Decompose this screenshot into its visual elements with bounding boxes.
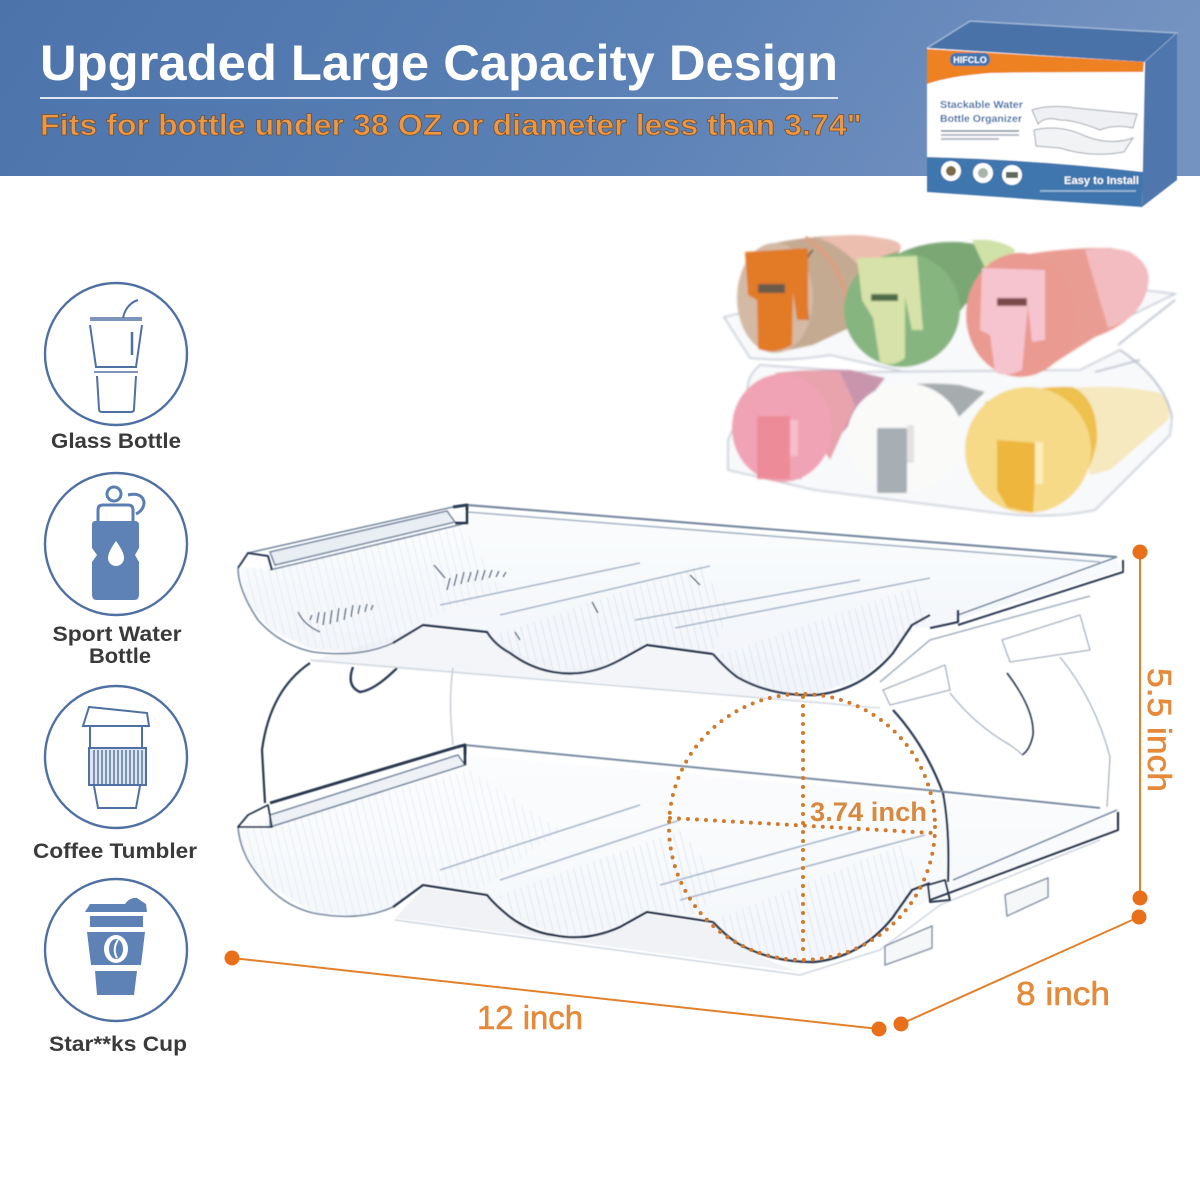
- dimension: 5.5 inch: [1132, 544, 1178, 906]
- upper tray lines: [238, 505, 1117, 682]
- upper tray strong dash marks: [298, 565, 700, 640]
- dimension: 12 inch: [224, 950, 886, 1036]
- label: sport water bottle: Bottle: [89, 645, 151, 668]
- icon: cup: [45, 879, 187, 1021]
- dimension: 5.5 inch: 5.5 inch: [1141, 668, 1178, 792]
- product box: HIFCLO: [953, 55, 987, 65]
- label: sport water bottle: Sport Water: [52, 623, 182, 646]
- subtitle: Fits for bottle under 38 OZ or diameter less than 3.74": [40, 109, 862, 142]
- diameter label: 3.74 inch: [810, 797, 927, 827]
- icon: sport water bottle: [45, 473, 187, 615]
- rack outline small: [724, 289, 1175, 516]
- bottle: yellow: [965, 387, 1169, 513]
- icon: coffee tumbler: [45, 686, 187, 828]
- product box: [927, 21, 1177, 207]
- upper tray fill: [240, 510, 1123, 695]
- bottle: white and grey: [847, 383, 985, 493]
- rack rim small: [1095, 300, 1175, 418]
- dimension: 8 inch: 8 inch: [1016, 975, 1110, 1012]
- header band: [0, 0, 1200, 176]
- lower tray fill: [240, 755, 1118, 962]
- bottle: light pink: [732, 370, 885, 482]
- icon: glass bottle: [45, 283, 187, 425]
- title: Upgraded Large Capacity Design: [40, 35, 838, 91]
- product box: Bottle Organizer: [940, 113, 1022, 125]
- product box: Easy to Install: [1064, 175, 1139, 187]
- photo: stacked rack with bottles: [724, 235, 1175, 516]
- bottle: salmon pink: [966, 248, 1149, 377]
- diameter guide: [669, 694, 935, 960]
- bottle: green: [844, 240, 1015, 367]
- dimension: 8 inch: [894, 910, 1146, 1032]
- dimension: 12 inch: 12 inch: [477, 999, 583, 1036]
- main product: two-tier rack: [238, 505, 1123, 975]
- support arcs: [262, 663, 1033, 882]
- bottle: orange and tan: [737, 235, 901, 353]
- product box: Stackable Water: [940, 99, 1023, 111]
- feet: [885, 878, 1048, 965]
- band under upper tray: [310, 627, 880, 708]
- shadow under lower tray: [395, 840, 1100, 975]
- label: coffee tumbler: Coffee Tumbler: [33, 840, 197, 863]
- lower tray lines: [238, 745, 1117, 916]
- label: glass bottle: Glass Bottle: [51, 430, 181, 453]
- label: sport water bottle: [52, 623, 182, 668]
- label: cup: Star**ks Cup: [49, 1033, 187, 1056]
